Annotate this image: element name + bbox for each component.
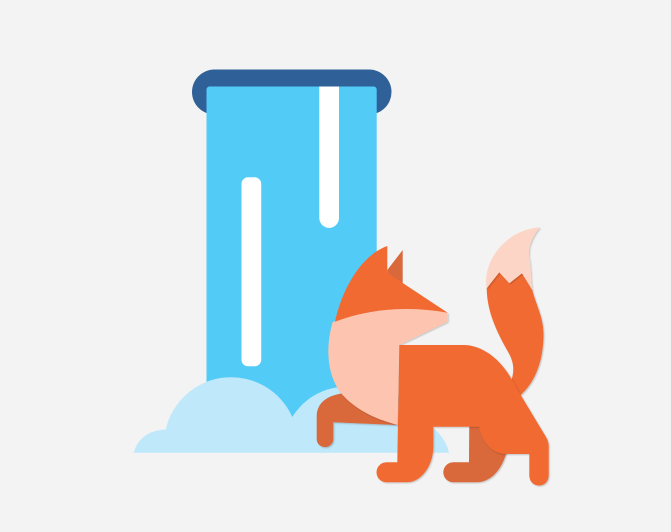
fox far back leg — [443, 420, 507, 482]
fox far ear — [387, 250, 403, 285]
water column — [206, 86, 377, 435]
waterfall — [192, 70, 392, 435]
fox head — [335, 246, 448, 322]
fox tail — [487, 272, 544, 395]
water streak right — [319, 86, 339, 228]
fox far front leg — [317, 393, 397, 447]
fox chest — [328, 309, 448, 425]
water streak left — [242, 177, 261, 366]
fox body — [376, 345, 549, 486]
cloud of mist — [134, 377, 449, 453]
fox tail tip — [486, 227, 540, 290]
fox — [317, 227, 549, 486]
waterfall top ledge — [192, 70, 392, 114]
